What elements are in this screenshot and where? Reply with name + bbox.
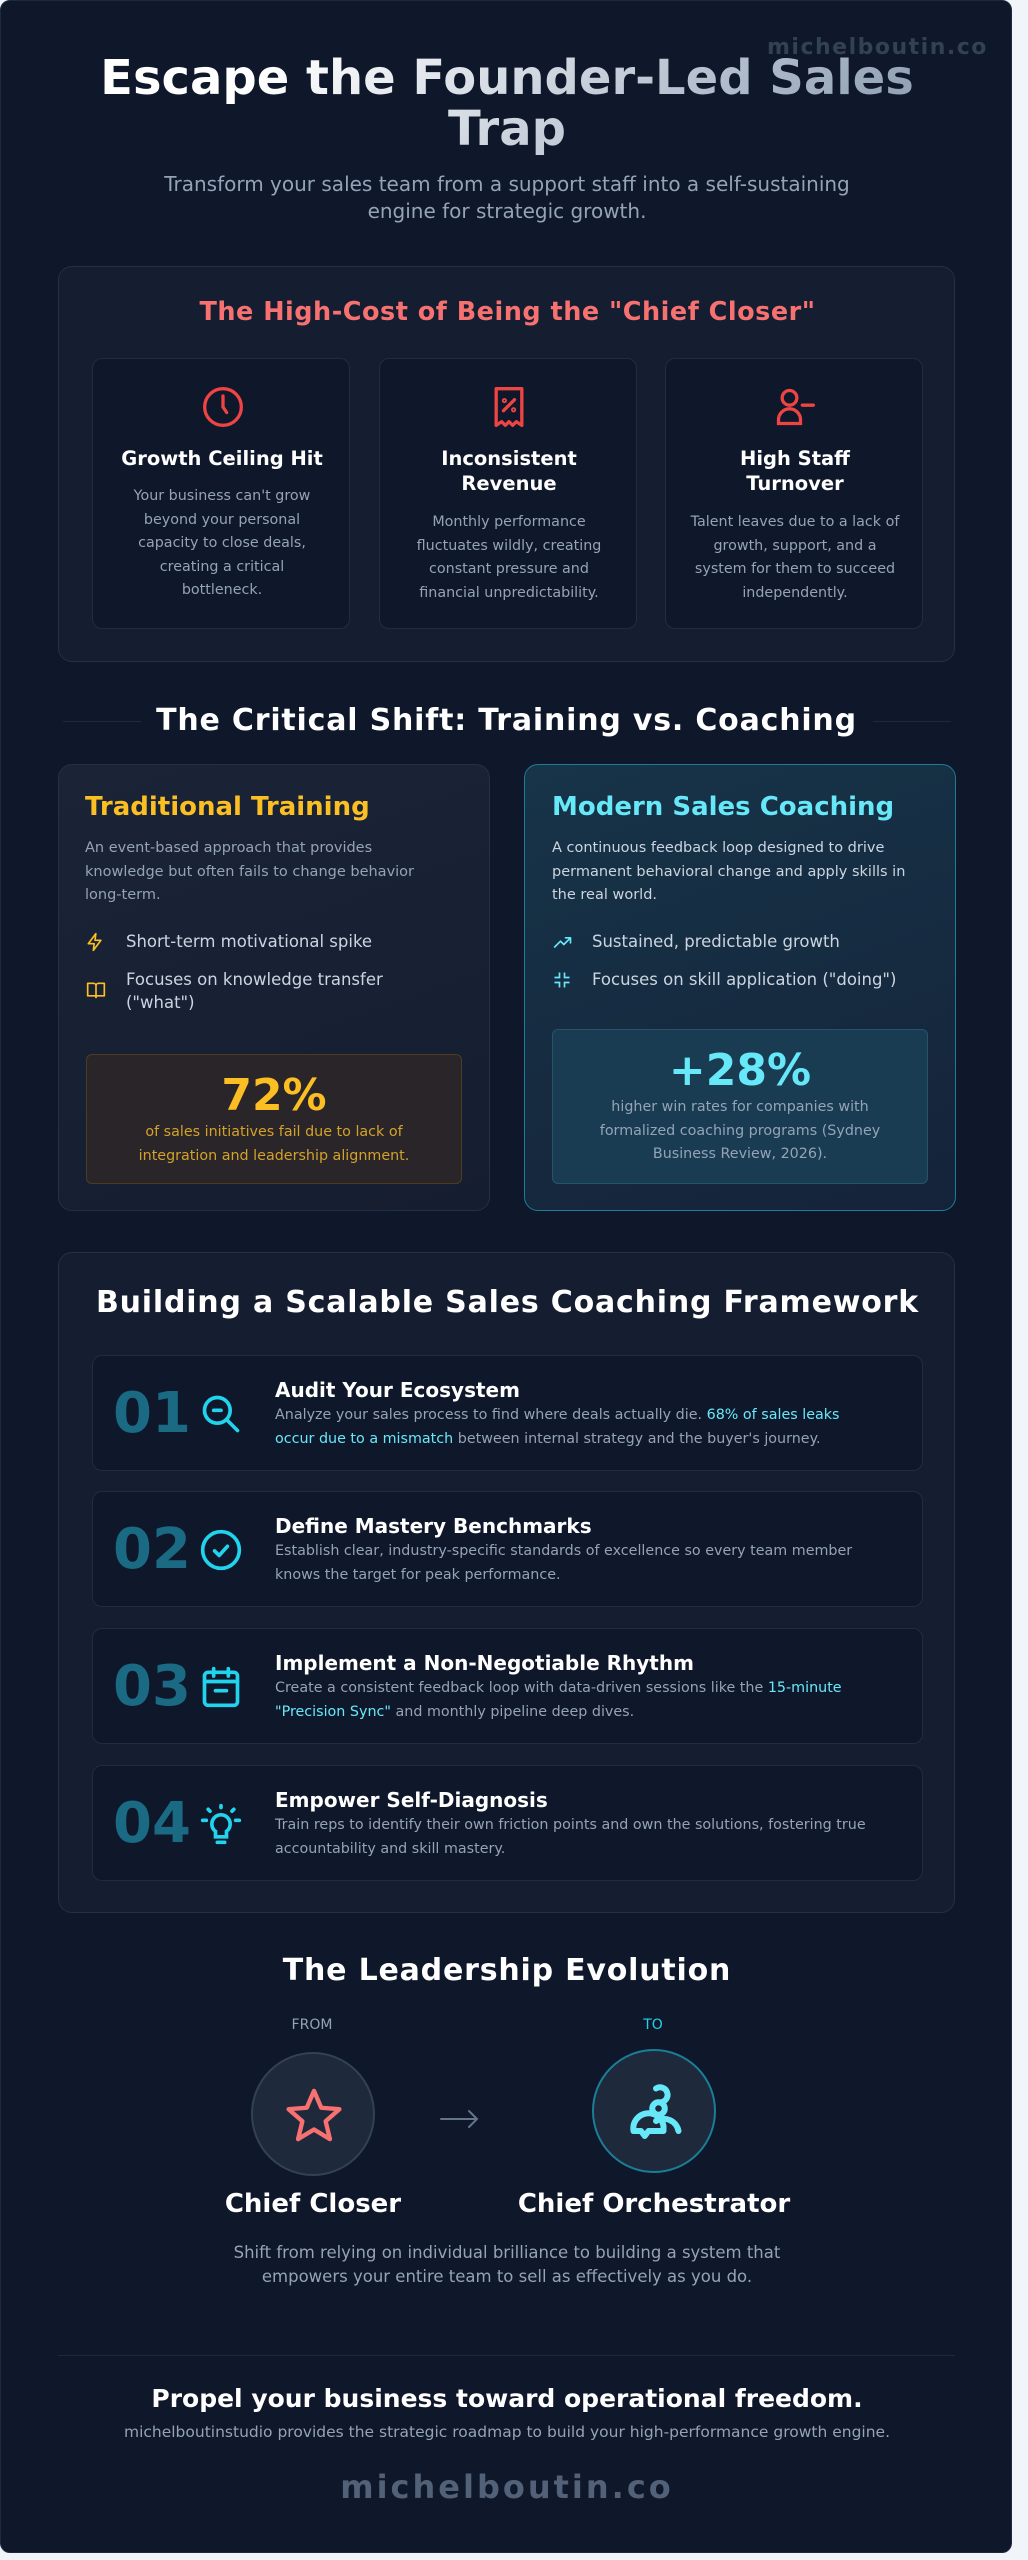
title: Growth Ceiling Hit: [121, 447, 323, 470]
icon: orchestrator: [592, 2049, 716, 2173]
bullets: [554, 932, 896, 989]
stat box: +28%: [552, 1029, 928, 1184]
label: to: TO: [643, 2017, 663, 2033]
icon: chief closer star: [251, 2052, 375, 2176]
stat box: 72%: [86, 1054, 462, 1184]
text: Talent leaves due to a lack of growth, support, and a system for them to succeed independently.: [691, 514, 899, 601]
icon: user minus: [776, 388, 815, 426]
panel: traditional training: [58, 764, 490, 1211]
heading: leadership evolution: The Leadership Evolution: [283, 1953, 731, 1988]
label: chief closer: Chief Closer: [225, 2189, 401, 2219]
step 04: Train reps to identify their own friction points and own the solutions, fostering true accountability and skill mastery.: [275, 1817, 866, 1857]
text: Your business can't grow beyond your personal capacity to close deals, creating a critical bottleneck.: [134, 488, 310, 598]
card: inconsistent revenue: [379, 358, 637, 629]
footer: sub: michelboutinstudio provides the strategic roadmap to build your high-performance growth engine.: [124, 2423, 890, 2441]
title: Turnover: [746, 472, 844, 495]
bullet: growth: Sustained, predictable growth: [592, 932, 840, 951]
step 04: 04: [113, 1791, 191, 1856]
footer: cta: Propel your business toward operational freedom.: [151, 2384, 863, 2413]
panel: high cost: [58, 266, 955, 662]
icon: check circle: [200, 1530, 242, 1570]
label: chief orchestrator: Chief Orchestrator: [518, 2189, 790, 2219]
step 01: Analyze your sales process to find where deals actually die. 68% of sales leaks occur due to a mismatch between internal strategy and the buyer's journey.: [275, 1407, 839, 1447]
panel: modern coaching: [524, 764, 956, 1211]
step 02: Establish clear, industry-specific standards of excellence so every team member knows the target for peak performance.: [275, 1543, 852, 1583]
stat box: +28%: +28%: [669, 1045, 811, 1096]
step 03: [92, 1628, 923, 1744]
title: Inconsistent: [441, 447, 577, 470]
bullet: skill: Focuses on skill application ("doing"): [592, 970, 896, 989]
step 01: [92, 1355, 923, 1471]
step 01: Audit Your Ecosystem: [275, 1378, 520, 1402]
footer: brand: michelboutin.co: [340, 2468, 674, 2506]
title: Escape the Founder-Led Sales Trap: [100, 50, 914, 157]
step 03: Create a consistent feedback loop with data-driven sessions like the 15-minute "Precision Sync" and monthly pipeline deep dives.: [275, 1680, 842, 1720]
stat box: +28%: higher win rates for companies with formalized coaching programs (Sydney Business Review, 2026).: [600, 1099, 880, 1162]
step 02: Define Mastery Benchmarks: [275, 1514, 592, 1538]
icon: clock: [203, 387, 243, 427]
icon: receipt: [494, 387, 524, 428]
step 04: Empower Self-Diagnosis: [275, 1788, 548, 1812]
step 02: 02: [113, 1517, 191, 1582]
label: from: FROM: [292, 2017, 332, 2033]
heading: Modern Sales Coaching: [552, 792, 894, 822]
text: Monthly performance fluctuates wildly, creating constant pressure and financial unpredictability.: [417, 514, 601, 601]
step 01: 01: [113, 1381, 191, 1446]
title: High Staff: [740, 447, 850, 470]
step 04: [92, 1765, 923, 1881]
heading: critical shift: The Critical Shift: Training vs. Coaching: [156, 703, 857, 738]
panel: framework: [58, 1252, 955, 1913]
subtitle: Transform your sales team from a support staff into a self-sustaining engine for strategic growth.: [164, 172, 850, 223]
title: [740, 447, 850, 495]
watermark top: michelboutin.co: [767, 35, 988, 60]
icon: bulb: [200, 1804, 242, 1844]
description: A continuous feedback loop designed to drive permanent behavioral change and apply skills in the real world.: [552, 840, 905, 903]
heading: high cost: The High-Cost of Being the "Chief Closer": [199, 297, 816, 327]
card: growth ceiling: [92, 358, 350, 629]
step 03: Implement a Non-Negotiable Rhythm: [275, 1651, 694, 1675]
icon: calendar: [202, 1666, 240, 1708]
stat box: 72%: of sales initiatives fail due to lack of integration and leadership alignment.: [139, 1124, 409, 1164]
bullet: spike: Short-term motivational spike: [126, 932, 372, 951]
step 03: 03: [113, 1654, 191, 1719]
heading: Building a Scalable Sales Coaching Framework: [96, 1285, 919, 1320]
evolution text: Shift from relying on individual brilliance to building a system that empowers your entire team to sell as effectively as you do.: [234, 2243, 780, 2286]
heading: Traditional Training: [85, 792, 370, 822]
title: [441, 447, 577, 495]
bullets: [86, 932, 383, 1012]
arrow: [440, 2110, 478, 2128]
title: Revenue: [461, 472, 557, 495]
icon: search: [202, 1396, 240, 1432]
description: An event-based approach that provides knowledge but often fails to change behavior long-term.: [85, 840, 414, 903]
step 02: [92, 1491, 923, 1607]
bullet: knowledge: Focuses on knowledge transfer ("what"): [126, 970, 383, 1012]
stat box: 72%: 72%: [221, 1070, 327, 1121]
card: staff turnover: [665, 358, 923, 629]
